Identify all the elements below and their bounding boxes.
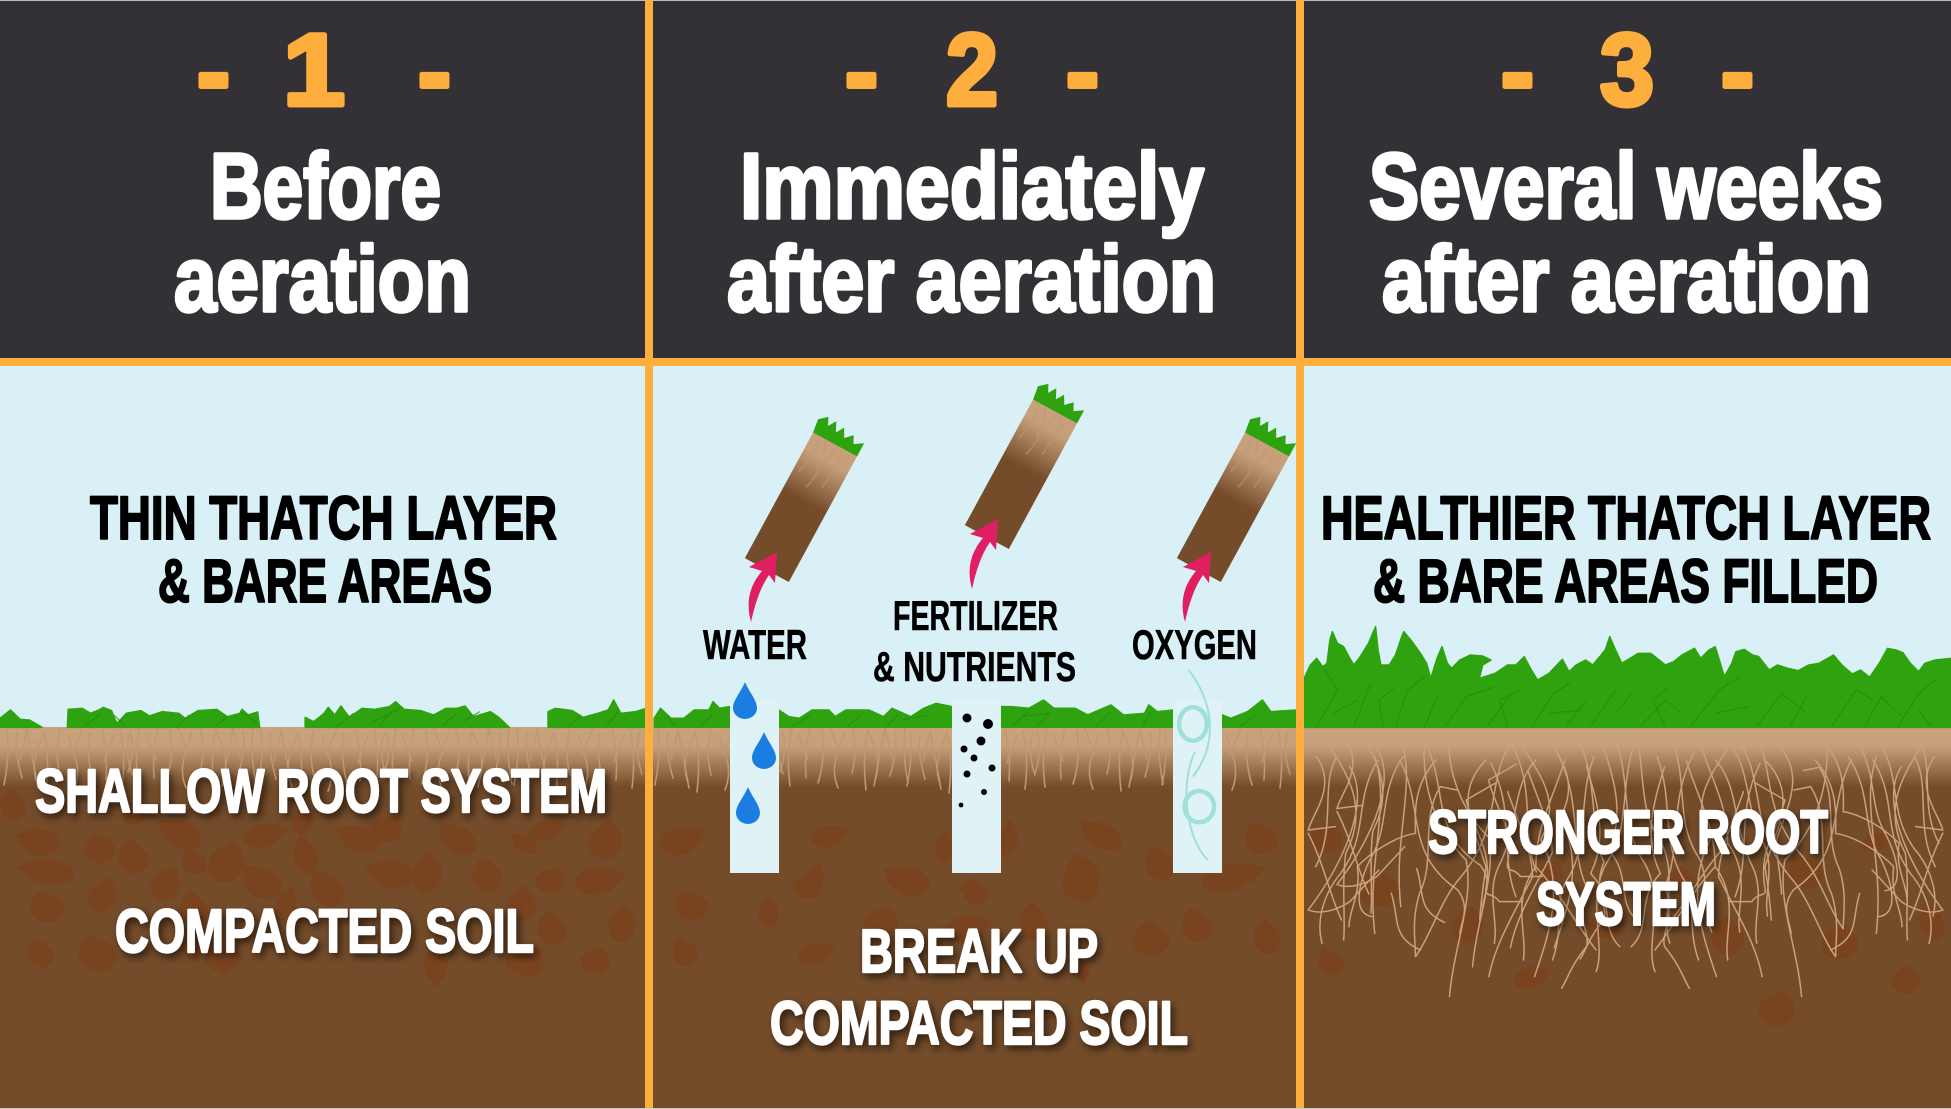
soil plug 2 <box>963 380 1087 549</box>
icon: water drops <box>733 682 776 824</box>
grass strip: panel 2 <box>654 700 1296 727</box>
compacted soil clumps: panel 2 <box>653 812 1284 984</box>
header 1 <box>174 13 471 331</box>
header 3 <box>1369 13 1883 331</box>
label: water: WATER <box>703 621 807 668</box>
soil plug 3 <box>1175 413 1299 582</box>
step number 3: - <box>1501 15 1534 129</box>
shallow roots: panel 1 <box>4 728 642 793</box>
heading: immediately after aeration <box>727 134 1216 331</box>
thick grass: panel 3 <box>1304 627 1951 727</box>
soil layer: panel 2 <box>650 727 1300 1108</box>
heading: immediately after aeration: Immediately <box>740 134 1204 238</box>
aeration hole: oxygen <box>1173 670 1222 873</box>
header bar <box>0 0 1951 358</box>
arrow: oxygen to plug <box>1183 552 1211 622</box>
shallow roots: panel 2 <box>655 728 1290 793</box>
heading: immediately after aeration: after aeration <box>727 227 1216 331</box>
bottom edge <box>0 1108 1951 1109</box>
step number 1: - <box>197 15 230 129</box>
label: oxygen: OXYGEN <box>1132 621 1257 668</box>
panel: before aeration <box>0 484 646 1108</box>
heading: before aeration <box>174 134 471 331</box>
text: healthier thatch layer <box>1321 484 1931 615</box>
heading: before aeration: Before <box>210 134 441 238</box>
arrow: fertilizer to plug <box>970 519 998 589</box>
soil clumps: panel 3 <box>1305 819 1949 1030</box>
compacted soil clumps: panel 1 <box>0 787 638 987</box>
text: break up compacted soil: COMPACTED SOIL <box>770 989 1188 1057</box>
label: fertilizer and nutrients: & NUTRIENTS <box>873 643 1076 690</box>
step number 2: 2 <box>946 13 998 127</box>
step number 3 <box>1501 13 1754 129</box>
text: stronger root system <box>1428 798 1828 938</box>
arrow: water to plug <box>749 552 777 622</box>
panel: immediately after aeration <box>650 380 1300 1108</box>
label: fertilizer and nutrients: FERTILIZER <box>893 592 1058 639</box>
aeration hole: water <box>730 682 779 873</box>
icon: nutrient particles <box>959 714 996 807</box>
label: fertilizer and nutrients <box>873 592 1076 690</box>
step number 2 <box>845 13 1099 129</box>
text: thin thatch layer: & BARE AREAS <box>158 547 492 615</box>
heading: before aeration: aeration <box>174 227 471 331</box>
text: stronger root system: SYSTEM <box>1536 870 1716 938</box>
soil layer: panel 3 <box>1300 727 1951 1108</box>
step number 3: - <box>1721 15 1754 129</box>
text: shallow root system: SHALLOW ROOT SYSTEM <box>35 757 607 825</box>
soil plug 1 <box>743 413 867 582</box>
deep roots: panel 3 <box>1308 723 1943 997</box>
step number 1 <box>197 13 451 129</box>
aeration hole: fertilizer <box>952 700 1001 873</box>
text: break up compacted soil <box>770 917 1188 1057</box>
header 2 <box>727 13 1216 331</box>
background sky <box>0 366 1951 728</box>
step number 3: 3 <box>1600 13 1654 127</box>
soil layer: panel 1 <box>0 727 646 1108</box>
step number 2: - <box>1066 15 1099 129</box>
icon: oxygen swirls <box>1179 670 1214 860</box>
step number 1: - <box>418 15 451 129</box>
text: thin thatch layer <box>90 484 557 615</box>
grass tufts: panel 1 <box>0 700 646 727</box>
heading: several weeks after aeration <box>1369 134 1883 331</box>
panel: several weeks after aeration <box>1300 484 1951 1108</box>
text: thin thatch layer: THIN THATCH LAYER <box>90 484 557 552</box>
text: break up compacted soil: BREAK UP <box>860 917 1098 985</box>
text: compacted soil: COMPACTED SOIL <box>115 897 534 965</box>
step number 2: - <box>845 15 878 129</box>
step number 1: 1 <box>283 13 345 127</box>
text: stronger root system: STRONGER ROOT <box>1428 798 1828 866</box>
